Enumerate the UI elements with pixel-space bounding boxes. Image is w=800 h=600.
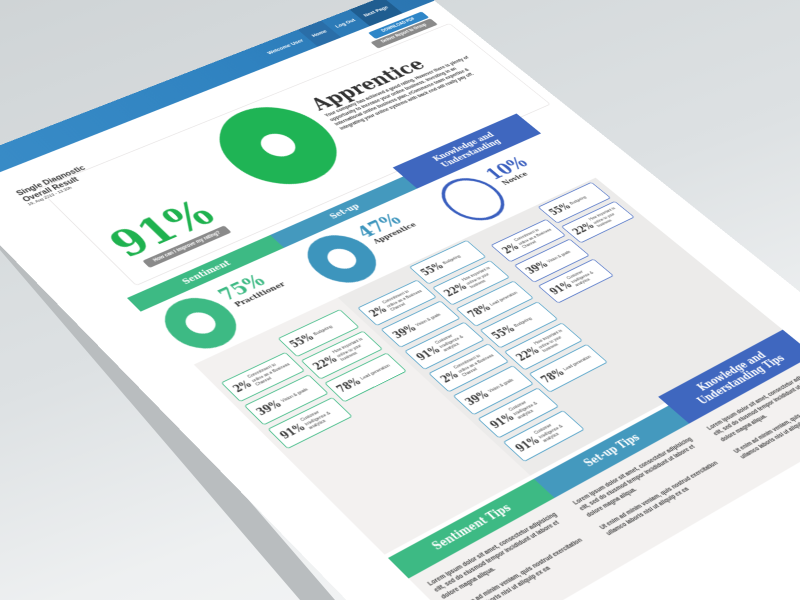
setup boxes: 91% [414, 345, 442, 362]
91%: 91% [99, 193, 224, 265]
knowledge boxes [307, 182, 634, 303]
knowledge boxes: Budgeting [569, 195, 588, 206]
text: Understanding [439, 137, 503, 169]
sentiment score: 75% [213, 271, 270, 305]
apprentice text: Your company has achieved a good rating. However there is plenty of opportunity to increase your online business. Investing in an international online business plan, eCommerce team expertise & integrating your online systems with back end will really pay off. [324, 56, 475, 131]
setup boxes: 55% [489, 324, 517, 341]
setup boxes: Budgeting [442, 254, 462, 265]
text: Knowledge and [430, 131, 497, 163]
text: Ut enim ad minim veniam, quis nostrud exercitation ullamco laboris nisi ut aliquip ex ea [599, 460, 719, 537]
setup boxes [307, 235, 608, 462]
text: Understanding Tips [694, 353, 787, 406]
setup boxes: 39% [390, 323, 418, 340]
setup boxes: 2% [438, 370, 461, 385]
sentiment boxes: 78% [334, 376, 363, 395]
text: Knowledge and [694, 350, 768, 393]
setup boxes: Vision & goals [487, 378, 515, 394]
nav: Home [310, 29, 328, 38]
setup boxes: Customer intelligence & analytics [508, 400, 539, 420]
tips bars: Sentiment Tips [429, 502, 514, 552]
nav: Next Page [362, 5, 390, 18]
setup boxes: Lead generation [489, 291, 519, 307]
setup boxes: 91% [513, 435, 542, 454]
sentiment boxes [170, 235, 406, 449]
text: Lorem ipsum dolor sit amet, consectetur adipisicing elit, sed do eiusmod tempor incididunt ut labore et dolore magna aliqua. [427, 512, 561, 600]
setup score: 47% [352, 210, 406, 242]
tips text [409, 355, 800, 600]
sentiment score [164, 271, 287, 349]
setup boxes: How important is online to your business [461, 266, 492, 289]
title: 19, Aug 2013 - 13.30h [27, 186, 73, 207]
setup boxes: Budgeting [513, 317, 533, 328]
setup boxes: Commitment to online as a Business Channel [453, 353, 495, 378]
text: Set-up [327, 202, 361, 220]
big donut [219, 106, 338, 184]
setup boxes: Customer intelligence & analytics [434, 334, 465, 353]
column bars: Sentiment [180, 258, 233, 286]
sentiment boxes: 2% [231, 379, 254, 394]
setup boxes: 78% [539, 367, 567, 385]
knowledge boxes: How important is online to your business [588, 207, 617, 228]
sentiment boxes: Budgeting [313, 325, 334, 336]
setup boxes: 55% [418, 261, 446, 278]
setup boxes: 22% [514, 345, 542, 363]
text: Set-up Tips [581, 432, 643, 469]
knowledge boxes: 22% [570, 221, 596, 237]
knowledge boxes: 2% [500, 242, 521, 256]
buttons [368, 11, 429, 39]
setup boxes: 39% [463, 389, 491, 408]
grey panels [194, 178, 790, 555]
header bar [0, 0, 434, 192]
sentiment boxes: Commitment to online as a Business Channel [247, 362, 291, 387]
knowledge score: Novice [500, 171, 530, 187]
sentiment boxes: 39% [254, 399, 284, 418]
improve button: How can I improve my rating? [152, 230, 222, 263]
text: Deliver Report to Group [380, 23, 428, 44]
text: Lorem ipsum dolor sit amet, consectetur adipisicing elit, sed do eiusmod tempor incididunt ut labore et dolore magna aliqua. [572, 437, 697, 518]
knowledge boxes: 91% [547, 280, 574, 297]
setup boxes: Commitment to online as a Business Channel [381, 289, 423, 312]
knowledge boxes: Vision & goals [546, 250, 572, 264]
sentiment boxes: 91% [278, 422, 307, 441]
overall card [38, 23, 551, 286]
setup score [307, 210, 419, 283]
knowledge boxes: 39% [523, 260, 550, 276]
knowledge boxes: 55% [547, 202, 573, 217]
setup boxes: Lead generation [562, 355, 592, 372]
sentiment score: Practitioner [233, 281, 287, 309]
buttons: DOWNLOAD PDF [381, 17, 416, 33]
sentiment boxes: Customer intelligence & analytics [300, 410, 332, 431]
title: Single Diagnostic [14, 164, 87, 197]
setup boxes: 78% [465, 303, 493, 320]
sentiment boxes: Vision & goals [280, 387, 309, 403]
knowledge score [441, 153, 532, 221]
sentiment boxes: 55% [287, 332, 316, 350]
column bars [127, 235, 284, 312]
setup boxes: Customer intelligence & analytics [533, 423, 564, 444]
nav: Welcome User [266, 38, 305, 55]
setup score: Apprentice [371, 221, 419, 245]
nav: Log Out [334, 18, 357, 29]
setup boxes: How important is online to your business [533, 329, 564, 353]
improve button [142, 225, 232, 268]
setup boxes: 91% [488, 412, 516, 431]
sentiment boxes: How important is online to your business [332, 337, 364, 362]
setup boxes: 22% [442, 282, 469, 298]
sentiment boxes: 22% [311, 354, 339, 372]
setup boxes: Vision & goals [415, 313, 442, 327]
nav [266, 0, 402, 55]
knowledge boxes: Commitment to online as a Business Channel [513, 228, 553, 250]
setup boxes: 2% [367, 305, 389, 319]
apprentice text: Apprentice [305, 55, 430, 114]
tips bars [388, 479, 555, 578]
sentiment boxes: Lead generation [359, 363, 391, 381]
knowledge boxes: Customer intelligence & analytics [566, 270, 595, 288]
title: Overall Result [21, 176, 81, 204]
knowledge score: 10% [480, 153, 532, 183]
